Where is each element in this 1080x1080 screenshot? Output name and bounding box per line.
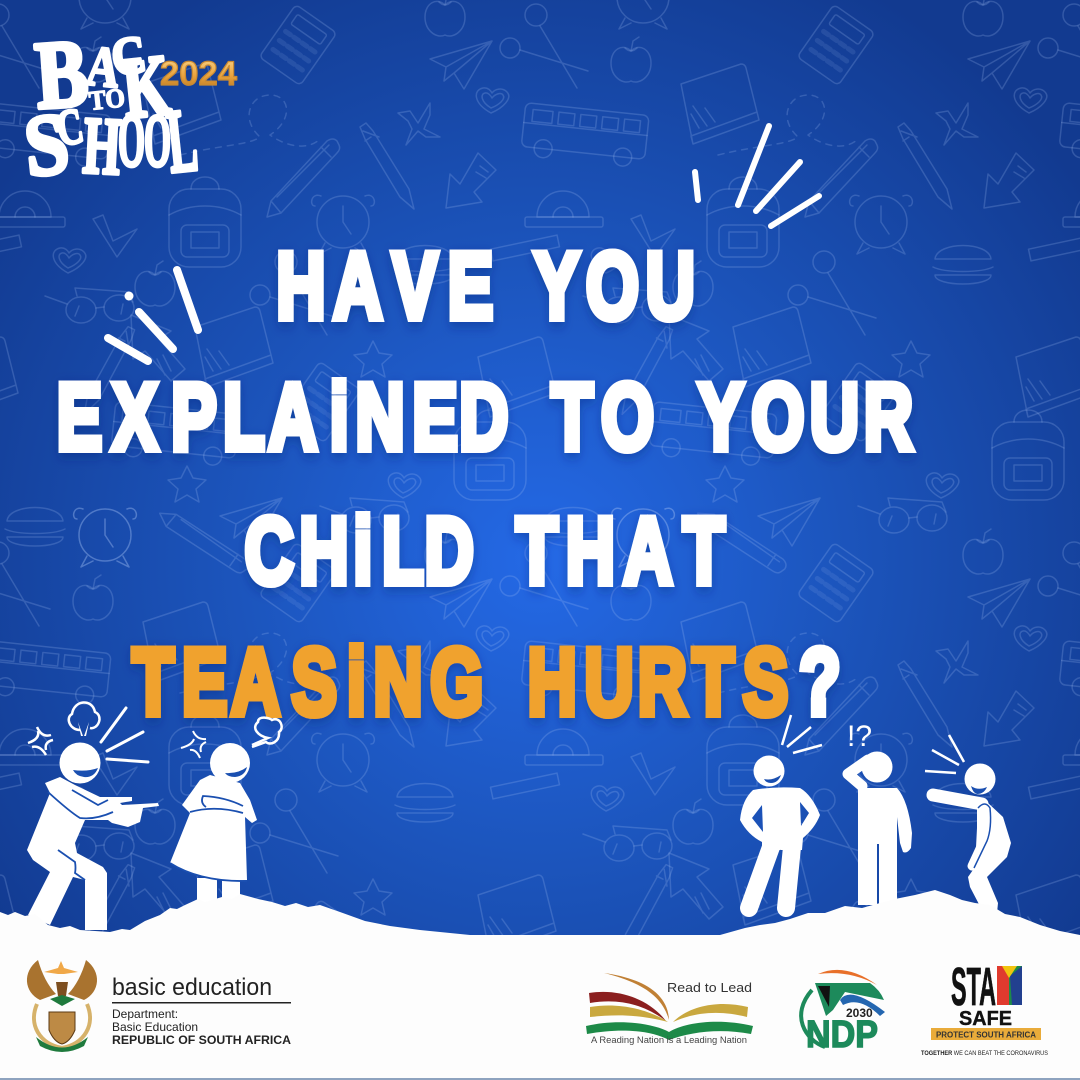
logo: Back to School 2024: C	[107, 24, 150, 89]
illustration: angry pointing person	[27, 702, 159, 930]
logo: Stay Safe: STA	[951, 957, 996, 1017]
logo: Back to School 2024: O	[118, 99, 145, 183]
label: question marks: !?	[847, 720, 872, 753]
logo: Back to School 2024: S	[20, 94, 73, 195]
logo: Read to Lead: Read to Lead	[667, 981, 752, 995]
icon: steam cloud	[252, 718, 282, 747]
logo: Stay Safe	[921, 957, 1049, 1057]
illustration: angry person with crossed arms	[170, 718, 282, 906]
logo text: basic education: REPUBLIC OF SOUTH AFRICA	[112, 1033, 291, 1047]
logo text: basic education: Basic Education	[112, 1020, 198, 1034]
icon: anger mark	[28, 727, 53, 755]
logo: Back to School 2024: B	[32, 19, 91, 129]
footer: torn white paper	[0, 890, 1080, 1078]
logo: Back to School 2024: TO	[88, 83, 126, 116]
logo: coat of arms	[27, 960, 97, 1052]
heading: TEASiNG HURTS?	[132, 630, 841, 735]
logo: Stay Safe: PROTECT SOUTH AFRICA	[936, 1030, 1036, 1040]
logo: Back to School 2024: H	[81, 102, 123, 192]
logo: Back to School 2024	[20, 19, 237, 195]
logo: Back to School 2024: O	[144, 99, 171, 183]
icon: steam cloud	[69, 702, 99, 736]
heading: EXPLAiNED TO YOUR	[57, 365, 913, 470]
logo: Read to Lead: A Reading Nation is a Leading Nation	[591, 1035, 747, 1046]
logo: Read to Lead	[586, 973, 753, 1046]
illustration: laughing person with hands on hips	[740, 715, 822, 908]
heading: HAVE YOU	[276, 234, 695, 339]
logo: NDP 2030	[801, 970, 885, 1056]
burst lines: top right	[695, 126, 819, 226]
logo text: basic education	[112, 974, 291, 1047]
logo: Back to School 2024: K	[118, 37, 174, 138]
illustration: laughing person pointing	[925, 735, 1011, 913]
burst lines: left of heading	[108, 270, 198, 361]
logo: Back to School 2024: A	[84, 34, 123, 101]
logo: Stay Safe: TOGETHER WE CAN BEAT THE CORONAVIRUS	[921, 1050, 1049, 1057]
logo: Back to School 2024: C	[52, 97, 88, 157]
footer: bottom strip	[0, 1078, 1080, 1080]
shout lines	[782, 715, 822, 753]
logo text: basic education: Department:	[112, 1007, 178, 1021]
logo: Stay Safe: SAFE	[959, 1008, 1012, 1030]
heading: CHiLD THAT	[245, 499, 725, 604]
logo: NDP 2030: NDP	[806, 1014, 878, 1056]
logo: NDP 2030: 2030	[846, 1006, 873, 1020]
shout lines	[101, 708, 148, 762]
heading	[57, 234, 913, 735]
logo text: basic education: basic education	[112, 974, 272, 1001]
logo year: 2024: 2024	[160, 55, 237, 93]
icon: anger mark	[181, 731, 206, 758]
logo: Back to School 2024: L	[163, 90, 202, 192]
shout lines	[925, 735, 964, 773]
illustration: confused person scratching head	[847, 720, 912, 905]
